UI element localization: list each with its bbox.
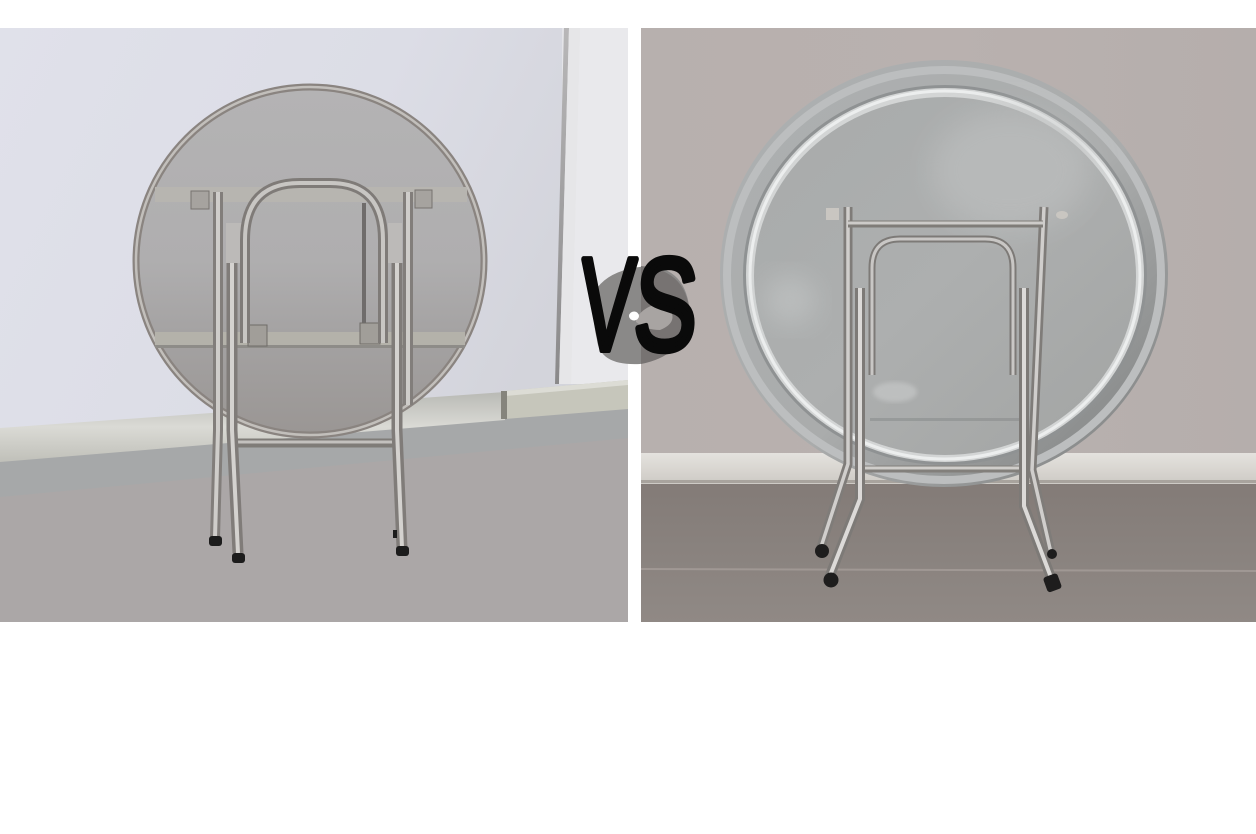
table top xyxy=(720,60,1168,487)
brush blob xyxy=(594,266,690,364)
carpet xyxy=(0,438,628,622)
open legs xyxy=(820,207,1052,580)
floor xyxy=(641,482,1256,622)
folding legs xyxy=(215,183,408,553)
panel: right photo, open round table xyxy=(641,28,1256,622)
wall xyxy=(641,28,1256,456)
door frame xyxy=(555,28,628,384)
rubber feet xyxy=(209,530,409,563)
brackets xyxy=(191,191,209,209)
floor xyxy=(0,408,628,498)
VS text: S xyxy=(630,232,702,379)
rubber feet xyxy=(815,544,1062,593)
table top xyxy=(136,87,484,435)
VS text: V xyxy=(576,231,639,379)
skirting board xyxy=(641,453,1256,484)
skirting board xyxy=(0,392,505,462)
wall xyxy=(0,28,628,428)
VS text xyxy=(576,231,702,379)
panel: left photo, folded round table xyxy=(0,28,628,622)
mounting rails xyxy=(155,187,467,202)
badge: VS with brush stroke xyxy=(576,231,702,379)
